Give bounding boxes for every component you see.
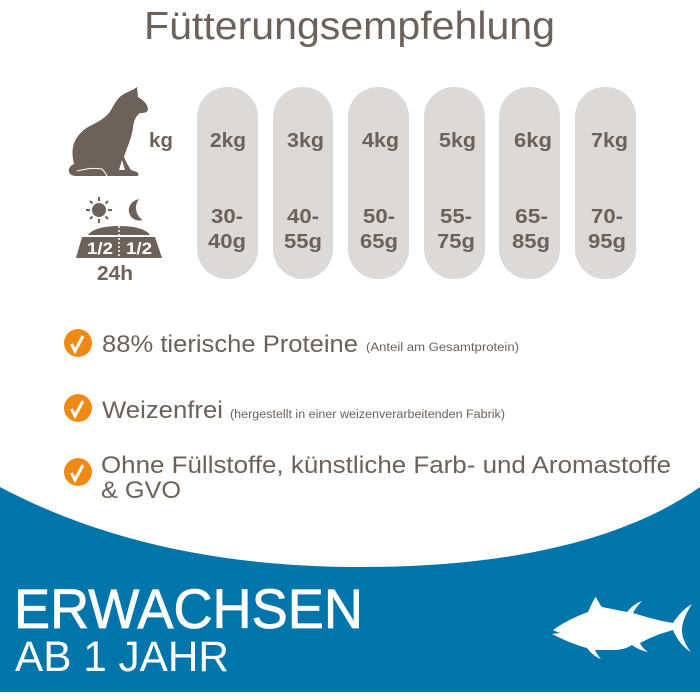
icon: cat <box>69 87 148 176</box>
column: 7kg <box>575 87 636 279</box>
column: 3kg: 40- <box>287 206 319 228</box>
blue banner <box>0 487 700 692</box>
benefit: no fillers <box>101 452 671 504</box>
column: 4kg: 50- <box>363 206 395 228</box>
column: 5kg: 55- <box>440 206 472 228</box>
icon: tuna <box>552 597 692 659</box>
icon: food bowl: 1/2 <box>126 240 152 258</box>
column: 4kg: 4kg <box>362 130 399 152</box>
column: 4kg <box>348 87 409 279</box>
label: 24h: 24h <box>97 263 133 285</box>
column: 2kg <box>197 87 258 279</box>
column: 6kg: 85g <box>512 231 550 253</box>
column: 2kg: 30- <box>211 206 243 228</box>
banner subheading: AB 1 JAHR <box>15 633 229 681</box>
column: 6kg: 6kg <box>514 130 552 152</box>
column: 4kg: 65g <box>360 231 398 253</box>
benefit: no fillers: Ohne Füllstoffe, künstliche Farb- und Aromastoffe <box>101 452 671 479</box>
icon: check 2 <box>64 394 92 422</box>
note: proteins: (Anteil am Gesamtprotein) <box>366 342 519 354</box>
title: Fütterungsempfehlung <box>144 5 555 48</box>
column: 6kg: 65- <box>515 206 548 228</box>
column: 7kg: 70- <box>591 206 623 228</box>
column: 2kg: 40g <box>208 231 246 253</box>
icon: food bowl <box>76 226 162 259</box>
column: 2kg: 2kg <box>210 130 246 152</box>
icon: moon <box>129 199 143 221</box>
icon: food bowl: 1/2 <box>87 240 113 258</box>
column: 5kg: 75g <box>437 231 475 253</box>
banner heading: ERWACHSEN <box>14 577 363 640</box>
column: 5kg <box>424 87 485 279</box>
column: 3kg: 3kg <box>287 130 324 152</box>
icon: check 1 <box>64 329 92 357</box>
column: 7kg: 7kg <box>591 130 628 152</box>
column: 3kg: 55g <box>284 231 322 253</box>
icon: sun <box>86 197 112 223</box>
column: 6kg <box>499 87 560 279</box>
benefit: proteins: 88% tierische Proteine <box>102 331 358 358</box>
icon: check 3 <box>64 458 92 486</box>
label: kg: kg <box>149 130 173 152</box>
column: 3kg <box>273 87 333 279</box>
benefit: wheat free: Weizenfrei <box>102 397 223 424</box>
column: 5kg: 5kg <box>439 130 476 152</box>
benefit: no fillers: & GVO <box>101 477 181 504</box>
column: 7kg: 95g <box>588 231 626 253</box>
note: wheat free: (hergestellt in einer weizenverarbeitenden Fabrik) <box>230 409 505 421</box>
